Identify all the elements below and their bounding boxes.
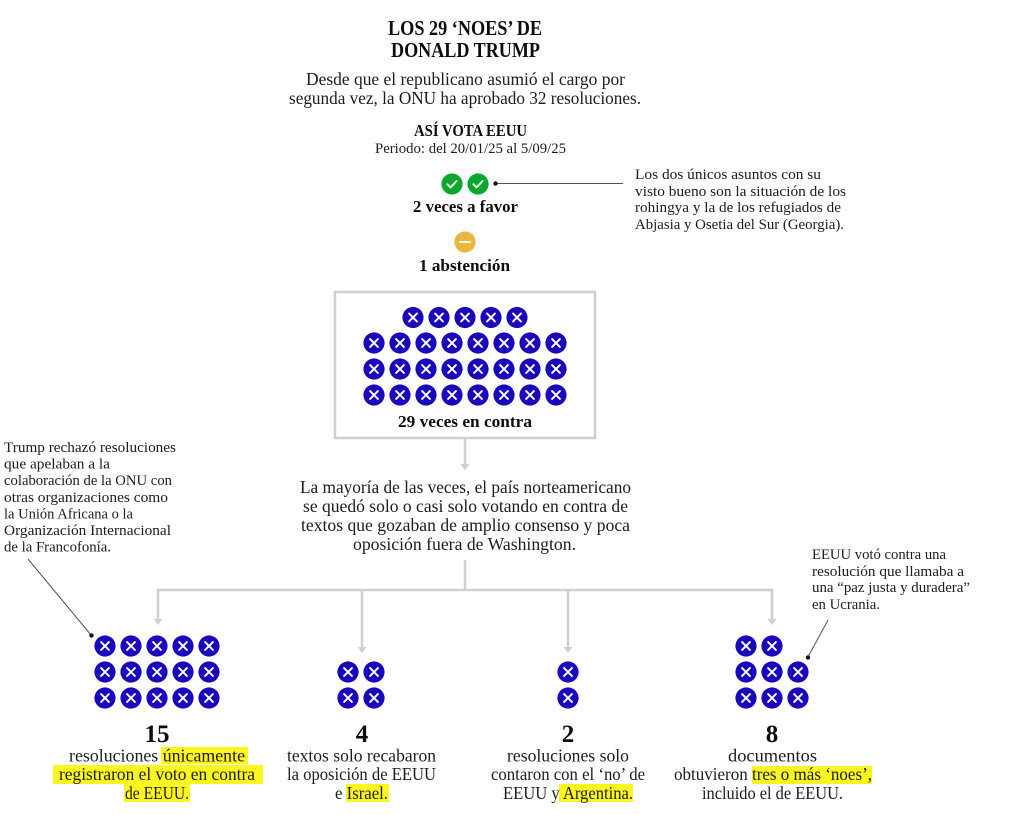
icon: green check 2 (467, 173, 489, 195)
callout: Ukraine note: una “paz justa y duradera” (812, 580, 970, 596)
callout: Ukraine note: EEUU votó contra una (812, 547, 947, 563)
text block: explanation (300, 477, 631, 554)
icons: 8 crosses (735, 635, 809, 709)
panel: 29 votes against (335, 292, 595, 438)
callout: favour votes: Abjasia y Osetia del Sur (Georgia). (635, 217, 844, 233)
text: 15 resolutions: registraron el voto en contra (59, 764, 255, 784)
icons: 29 crosses (363, 307, 567, 406)
text: 15 resolutions: resoluciones únicamente (69, 746, 245, 766)
text: 4 texts: la oposición de EEUU (287, 764, 436, 784)
text: 15 resolutions (53, 746, 263, 803)
text: 8 documents (674, 746, 872, 803)
callout: left note: de la Francofonía. (4, 540, 111, 556)
text: 2 resolutions: contaron con el ‘no’ de (491, 764, 645, 784)
title (388, 16, 542, 62)
callout leader: left note (28, 559, 94, 638)
text block: explanation: oposición fuera de Washington. (353, 534, 576, 554)
callout: Ukraine note: resolución que llamaba a (812, 564, 965, 580)
callout: favour votes: rohingya y la de los refugiados de (635, 200, 841, 216)
callout: Ukraine note (812, 547, 970, 613)
text block: explanation: textos que gozaban de amplio consenso y poca (301, 515, 630, 535)
icons: 4 crosses (337, 661, 385, 709)
subtitle (289, 69, 641, 108)
label: 29 veces en contra: 29 veces en contra (398, 412, 532, 431)
text: 4 texts: e Israel. (335, 783, 388, 803)
callout: left note (4, 440, 176, 556)
callout: left note: Trump rechazó resoluciones (4, 440, 176, 456)
callout: left note: que apelaban a la (4, 456, 111, 472)
number: 15: 15 (144, 721, 170, 748)
column: 15 resolutions (53, 635, 263, 803)
title: DONALD TRUMP (391, 38, 540, 62)
text: 8 documents: incluido el de EEUU. (702, 783, 843, 803)
text: 8 documents: documentos (728, 746, 817, 766)
column: 8 documents (674, 635, 872, 803)
abstention (419, 231, 511, 275)
text: 4 texts (287, 746, 436, 803)
section heading: así vota EEUU: ASÍ VOTA EEUU (414, 121, 527, 140)
icon: green check 1 (441, 173, 463, 195)
callout leader: favour votes (493, 181, 623, 186)
subtitle: segunda vez, la ONU ha aprobado 32 resoluciones. (289, 88, 641, 108)
label: 1 abstención: 1 abstención (419, 256, 511, 275)
title: LOS 29 ‘NOES’ DE (388, 16, 542, 40)
callout: favour votes: Los dos únicos asuntos con su (635, 167, 822, 183)
callout: left note: la Unión Africana o la (4, 506, 134, 522)
callout: favour votes: visto bueno son la situación de los (635, 184, 846, 200)
icon: abstention (454, 231, 476, 253)
text: 2 resolutions: resoluciones solo (507, 746, 629, 766)
number: 4: 4 (356, 721, 369, 748)
callout: favour votes (635, 167, 846, 233)
section heading: así vota EEUU: Periodo: del 20/01/25 al 5/09/25 (375, 141, 566, 157)
text: 4 texts: textos solo recabaron (287, 746, 436, 766)
callout leader: Ukraine note (806, 620, 828, 660)
callout: left note: otras organizaciones como (4, 490, 168, 506)
number: 2: 2 (562, 721, 574, 748)
votes in favour (413, 173, 518, 216)
number: 8: 8 (766, 721, 778, 748)
text block: explanation: se quedó solo o casi solo votando en contra de (303, 496, 628, 516)
callout: left note: colaboración de la ONU con (4, 473, 173, 489)
callout: Ukraine note: en Ucrania. (812, 597, 880, 613)
text: 15 resolutions: de EEUU. (125, 783, 189, 803)
subtitle: Desde que el republicano asumió el cargo por (306, 69, 625, 89)
callout: left note: Organización Internacional (4, 523, 171, 539)
text: 2 resolutions: EEUU y Argentina. (503, 783, 633, 803)
icons: 15 crosses (94, 635, 220, 709)
icons: 2 crosses (557, 661, 579, 709)
arrow: panel to paragraph (460, 439, 470, 470)
connector arrows (154, 560, 776, 653)
section heading: así vota EEUU (375, 121, 566, 157)
label: 2 veces a favor: 2 veces a favor (413, 197, 518, 216)
text: 8 documents: obtuvieron tres o más ‘noes’, (674, 764, 872, 784)
text: 2 resolutions (491, 746, 645, 803)
column: 2 resolutions (491, 661, 645, 803)
column: 4 texts (287, 661, 436, 803)
text block: explanation: La mayoría de las veces, el país norteamericano (300, 477, 631, 497)
